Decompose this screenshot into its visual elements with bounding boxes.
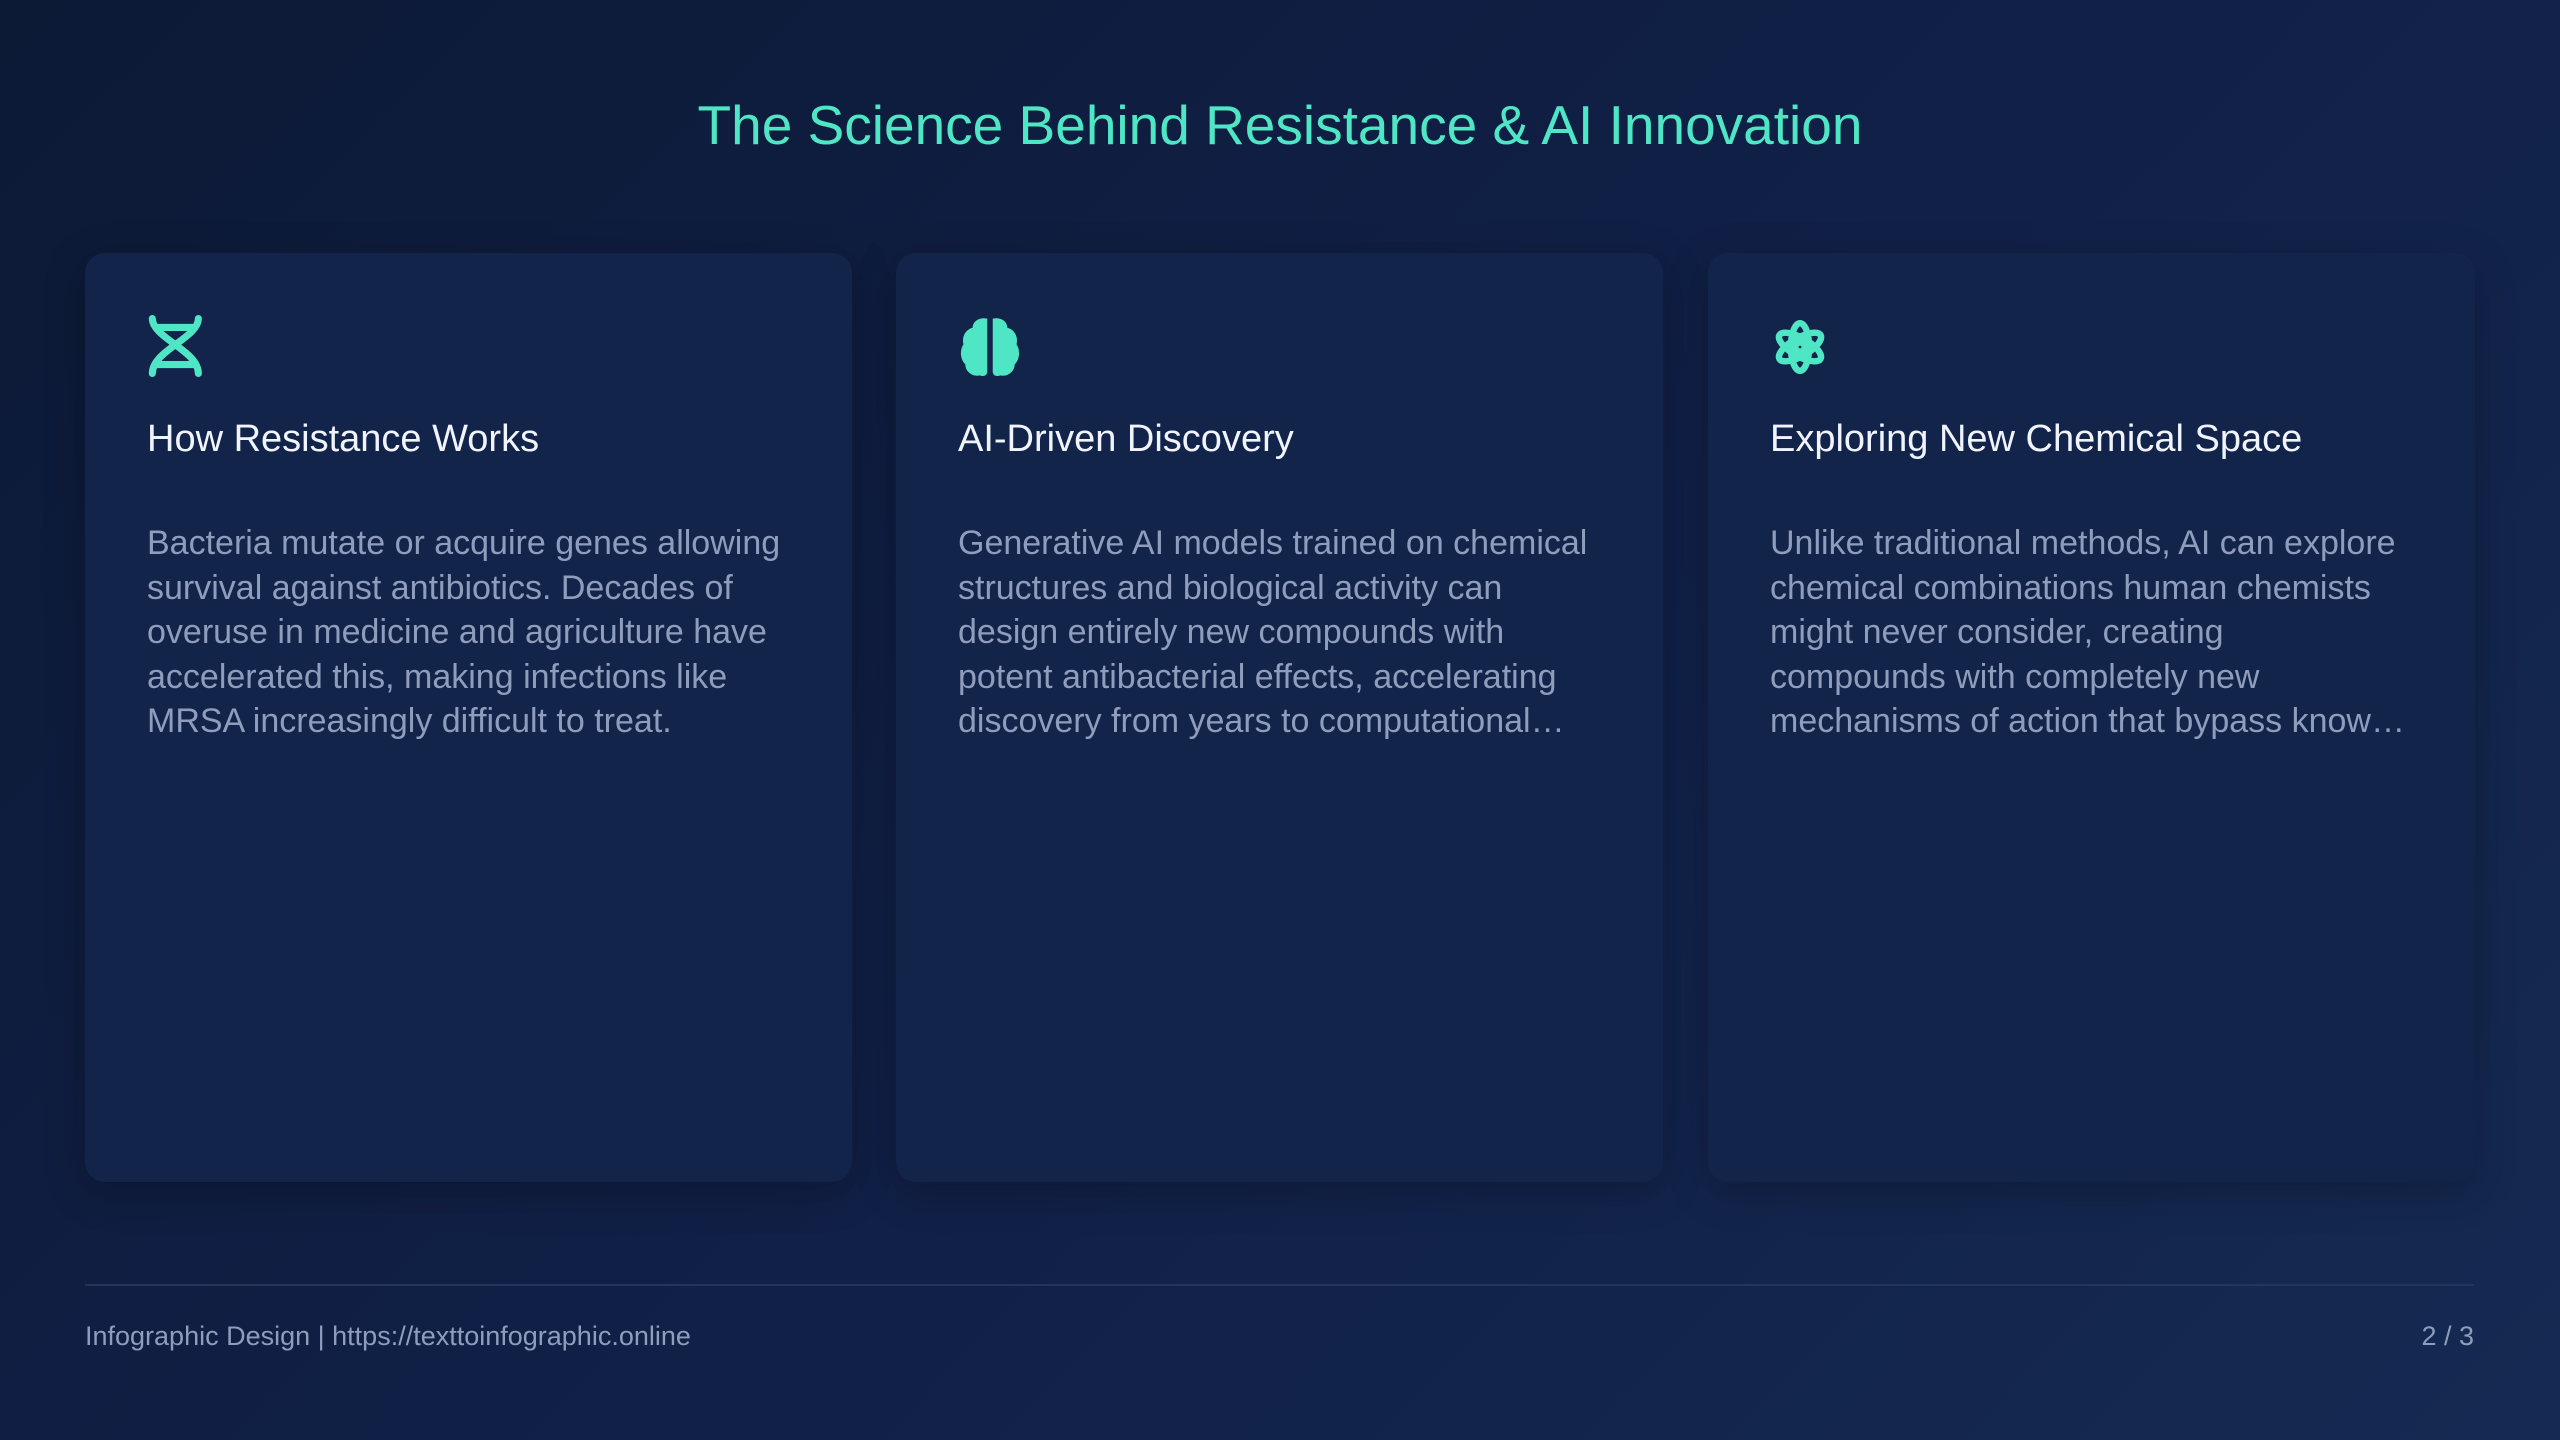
panel: ai-driven discovery bbox=[896, 253, 1663, 1182]
icon: dna bbox=[148, 315, 202, 377]
body text: compounds with completely new bbox=[1770, 658, 2259, 696]
body text bbox=[1770, 524, 2405, 740]
icon: atom bbox=[1776, 320, 1824, 374]
heading: AI-Driven Discovery bbox=[958, 418, 1294, 460]
heading: Exploring New Chemical Space bbox=[1770, 418, 2302, 460]
body text: chemical combinations human chemists bbox=[1770, 568, 2371, 606]
body text: Unlike traditional methods, AI can explore bbox=[1770, 524, 2396, 562]
body text: mechanisms of action that bypass know… bbox=[1770, 702, 2405, 740]
footer: page number: 2 / 3 bbox=[2421, 1321, 2474, 1351]
title: The Science Behind Resistance & AI Innovation bbox=[698, 94, 1862, 156]
body text: Bacteria mutate or acquire genes allowing survival against antibiotics. Decades of overuse in medicine and agriculture have accelerated this, making infections like MRSA increasingly difficult to treat. bbox=[147, 524, 780, 740]
panel: how resistance works bbox=[85, 253, 852, 1182]
icon: brain bbox=[960, 318, 1020, 376]
panel: exploring new chemical space bbox=[1708, 253, 2475, 1182]
body text: might never consider, creating bbox=[1770, 613, 2224, 651]
heading: How Resistance Works bbox=[147, 418, 539, 460]
footer: credit: Infographic Design | https://texttoinfographic.online bbox=[85, 1321, 691, 1351]
